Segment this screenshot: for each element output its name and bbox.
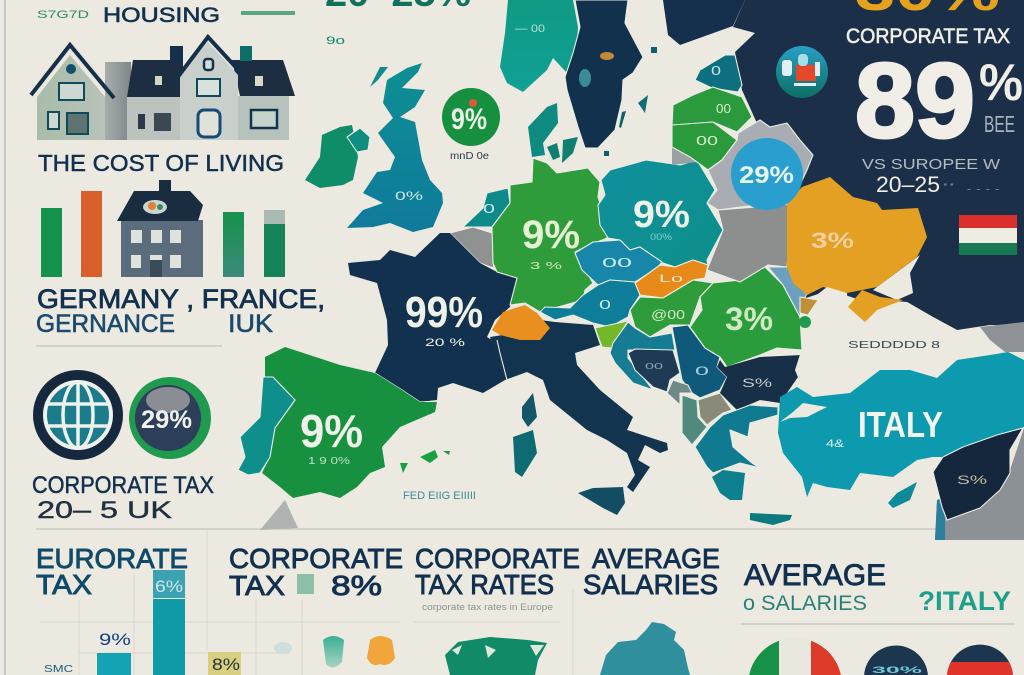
grey wedge at Spanish coast xyxy=(260,500,298,530)
flag: Hungary xyxy=(959,215,1017,255)
icon: row of houses xyxy=(31,37,295,140)
Ukraine value: 3% xyxy=(811,228,854,253)
grid lines of lower panels xyxy=(36,346,1015,675)
sub caption: corporate tax rates in Europe xyxy=(422,602,553,612)
western Ukraine xyxy=(707,204,793,282)
Poland value: 9% xyxy=(633,194,690,236)
circle badge: 9% xyxy=(442,88,500,146)
Estonia xyxy=(695,55,742,92)
Romania value: 3% xyxy=(725,301,773,337)
icon: team badge xyxy=(776,46,828,98)
badge: 29% xyxy=(129,377,211,459)
Czechia label: 00 xyxy=(602,255,632,270)
badge caption: mnD 0e xyxy=(450,151,489,162)
circle badge: 9%: 9% xyxy=(451,103,487,136)
housing left ornament: S7G7D xyxy=(37,9,89,21)
Germany value: 9% xyxy=(522,213,580,257)
Crimea xyxy=(848,290,903,322)
UK marker: 0% xyxy=(395,189,424,203)
Balearic Islands xyxy=(400,450,450,473)
flag circle: Italy xyxy=(749,638,841,675)
Hungary xyxy=(630,280,713,337)
chart value: 8%: 8% xyxy=(212,655,240,674)
Spain xyxy=(262,347,437,498)
heading: Italy teal: ?ITALY xyxy=(918,586,1011,616)
Moldova xyxy=(768,267,808,317)
Spain value: 9% xyxy=(300,405,363,457)
heading: 8%: 8% xyxy=(331,570,382,601)
heading: Eurorate tax: EURORATE xyxy=(36,543,188,574)
bar chart: Eurorate tax: SMC xyxy=(44,664,73,675)
dark sea panel, upper right xyxy=(733,0,1024,330)
corporate tax panel xyxy=(846,0,1023,197)
Latvia label: 00 xyxy=(716,101,731,116)
Norway marker: — 00 xyxy=(515,23,545,35)
Danish islands xyxy=(547,137,578,163)
icon: apartment house xyxy=(117,180,203,277)
marker: teal spot xyxy=(579,69,591,87)
badge: 29%: 29% xyxy=(141,406,192,434)
Croatia xyxy=(610,322,675,390)
Cyprus xyxy=(888,482,917,508)
Estonia label: 0 xyxy=(711,63,721,78)
Montenegro xyxy=(667,380,692,405)
small markers on Sweden xyxy=(579,52,614,87)
Portugal xyxy=(238,377,295,475)
Czechia xyxy=(575,240,662,285)
badge: 30%: 30% xyxy=(872,665,922,675)
Sea of Marmara xyxy=(780,403,827,422)
Corsica xyxy=(522,393,537,427)
marker: orange spot xyxy=(600,52,614,60)
comparison line: VS SUROPEE W xyxy=(862,156,1001,173)
Sicily xyxy=(578,487,625,515)
Syria label: S% xyxy=(957,473,988,487)
Romania xyxy=(690,267,802,367)
France xyxy=(348,233,517,402)
Spain note: 1 9 0% xyxy=(308,456,350,467)
panel heading: CORPORATE TAX xyxy=(846,25,1010,48)
Italy xyxy=(490,320,668,492)
chart value: 8% xyxy=(208,652,241,675)
Bosnia xyxy=(628,349,680,392)
Lithuania label: 00 xyxy=(696,133,718,148)
France and Spain border xyxy=(375,373,437,402)
Poland note: 00% xyxy=(650,232,672,242)
text: countries line one: GERMANY , FRANCE, xyxy=(37,284,325,314)
Hungary label: @00 xyxy=(651,307,685,322)
Serbia xyxy=(672,325,727,398)
text: countries line two: GERNANCE xyxy=(36,310,175,338)
Kaliningrad xyxy=(672,147,698,165)
blue sliver xyxy=(935,497,945,540)
United Kingdom xyxy=(347,63,443,232)
icon: green marker xyxy=(323,636,344,668)
heading: corporate two: CORPORATE xyxy=(415,543,580,574)
icon: globe xyxy=(33,370,123,460)
Slovakia label: Lo xyxy=(659,273,683,285)
Turkey label: 4& xyxy=(826,438,845,450)
Bulgaria label: S% xyxy=(742,376,773,390)
Northern Ireland xyxy=(347,128,370,152)
Ukraine xyxy=(787,177,927,295)
Austria xyxy=(540,280,640,327)
heading: tax 8%: TAX xyxy=(229,570,285,601)
icon: teal map xyxy=(600,622,690,675)
heading: average: AVERAGE xyxy=(592,543,720,574)
France and Italy border xyxy=(497,340,507,380)
Greece xyxy=(695,405,778,473)
France note: 20 % xyxy=(425,337,465,349)
Turkey xyxy=(778,352,1024,497)
badge: 30% xyxy=(864,646,928,675)
Switzerland xyxy=(492,305,550,340)
Moldova coast xyxy=(800,297,818,315)
Serbia marker: 0 xyxy=(695,364,710,378)
icon: green map xyxy=(445,637,547,675)
range note: '' .... xyxy=(942,182,1002,192)
icon: faint blue spot xyxy=(274,642,292,654)
heading: tax rates: TAX RATES xyxy=(415,569,554,600)
Belarus xyxy=(707,120,813,210)
text: UK: IUK xyxy=(228,310,273,338)
bar chart: cost of living xyxy=(41,191,285,277)
Poland xyxy=(598,160,723,267)
icon: orange marker xyxy=(367,636,395,665)
small tax icon xyxy=(297,574,314,594)
Hebrides xyxy=(370,67,388,87)
Denmark xyxy=(528,103,558,157)
bar chart: Eurorate tax xyxy=(44,570,185,675)
Latvia xyxy=(672,87,752,132)
housing right ornament xyxy=(241,11,295,15)
small top mark: 9o xyxy=(326,35,345,47)
North Macedonia xyxy=(698,393,732,425)
Black Sea xyxy=(795,287,990,395)
Sardinia xyxy=(513,430,537,477)
Norway xyxy=(500,0,578,92)
Austria label: 0 xyxy=(599,297,611,312)
percent sign: % xyxy=(979,54,1023,112)
heading: salaries: SALARIES xyxy=(583,569,718,600)
map value labels xyxy=(300,23,988,487)
lower headings xyxy=(36,543,1011,616)
Bulgaria xyxy=(717,355,802,410)
Gotland xyxy=(638,95,648,113)
heading: housing: HOUSING xyxy=(103,4,220,27)
subheading: salaries: o SALARIES xyxy=(743,592,867,615)
Germany note: 3 % xyxy=(530,261,562,272)
Crete xyxy=(750,513,792,525)
Slovenia xyxy=(595,321,628,348)
Ireland xyxy=(305,125,358,188)
heading: the cost of living: THE COST OF LIVING xyxy=(38,150,284,176)
Netherlands label: 0 xyxy=(483,201,495,216)
Finland xyxy=(663,0,745,45)
Bosnia label: 00 xyxy=(645,362,664,371)
bar chart: Eurorate tax: 9% xyxy=(99,630,131,649)
Germany xyxy=(492,158,608,312)
text: corporate tax: CORPORATE TAX xyxy=(32,472,214,499)
black sea caption: SEDDDDD 8 xyxy=(848,340,941,351)
text: corporate tax range: 20– 5 UK xyxy=(37,497,172,524)
Sweden xyxy=(565,0,643,148)
flag circle: Germany xyxy=(947,645,1013,675)
Netherlands xyxy=(463,188,510,227)
heading: tax: TAX xyxy=(36,569,92,600)
big figure: 89 xyxy=(855,42,975,160)
Albania xyxy=(682,395,707,445)
Syria and Iraq xyxy=(933,428,1023,520)
map of Europe xyxy=(238,0,1024,540)
France value: 99% xyxy=(405,288,483,337)
Slovakia xyxy=(635,260,708,298)
eastern grey land xyxy=(980,322,1024,352)
heading: corporate: CORPORATE xyxy=(229,543,403,574)
Baltic islets xyxy=(604,47,657,156)
small green delta xyxy=(799,316,811,328)
circle badge: 29%: 29% xyxy=(739,162,794,189)
Belgium xyxy=(450,227,497,268)
range line: 20–25 xyxy=(876,172,940,197)
Peloponnese xyxy=(712,470,745,500)
grey land lower right xyxy=(935,428,1024,540)
circle badge: 29% xyxy=(731,138,803,210)
sea caption: FED EIIG EIIIII xyxy=(403,490,476,502)
Italy label: ITALY xyxy=(858,404,943,445)
Lithuania xyxy=(672,122,737,170)
Sea of Azov xyxy=(873,255,920,300)
bar chart: Eurorate tax: 6% xyxy=(155,577,183,596)
heading: average salaries: AVERAGE xyxy=(744,559,886,592)
